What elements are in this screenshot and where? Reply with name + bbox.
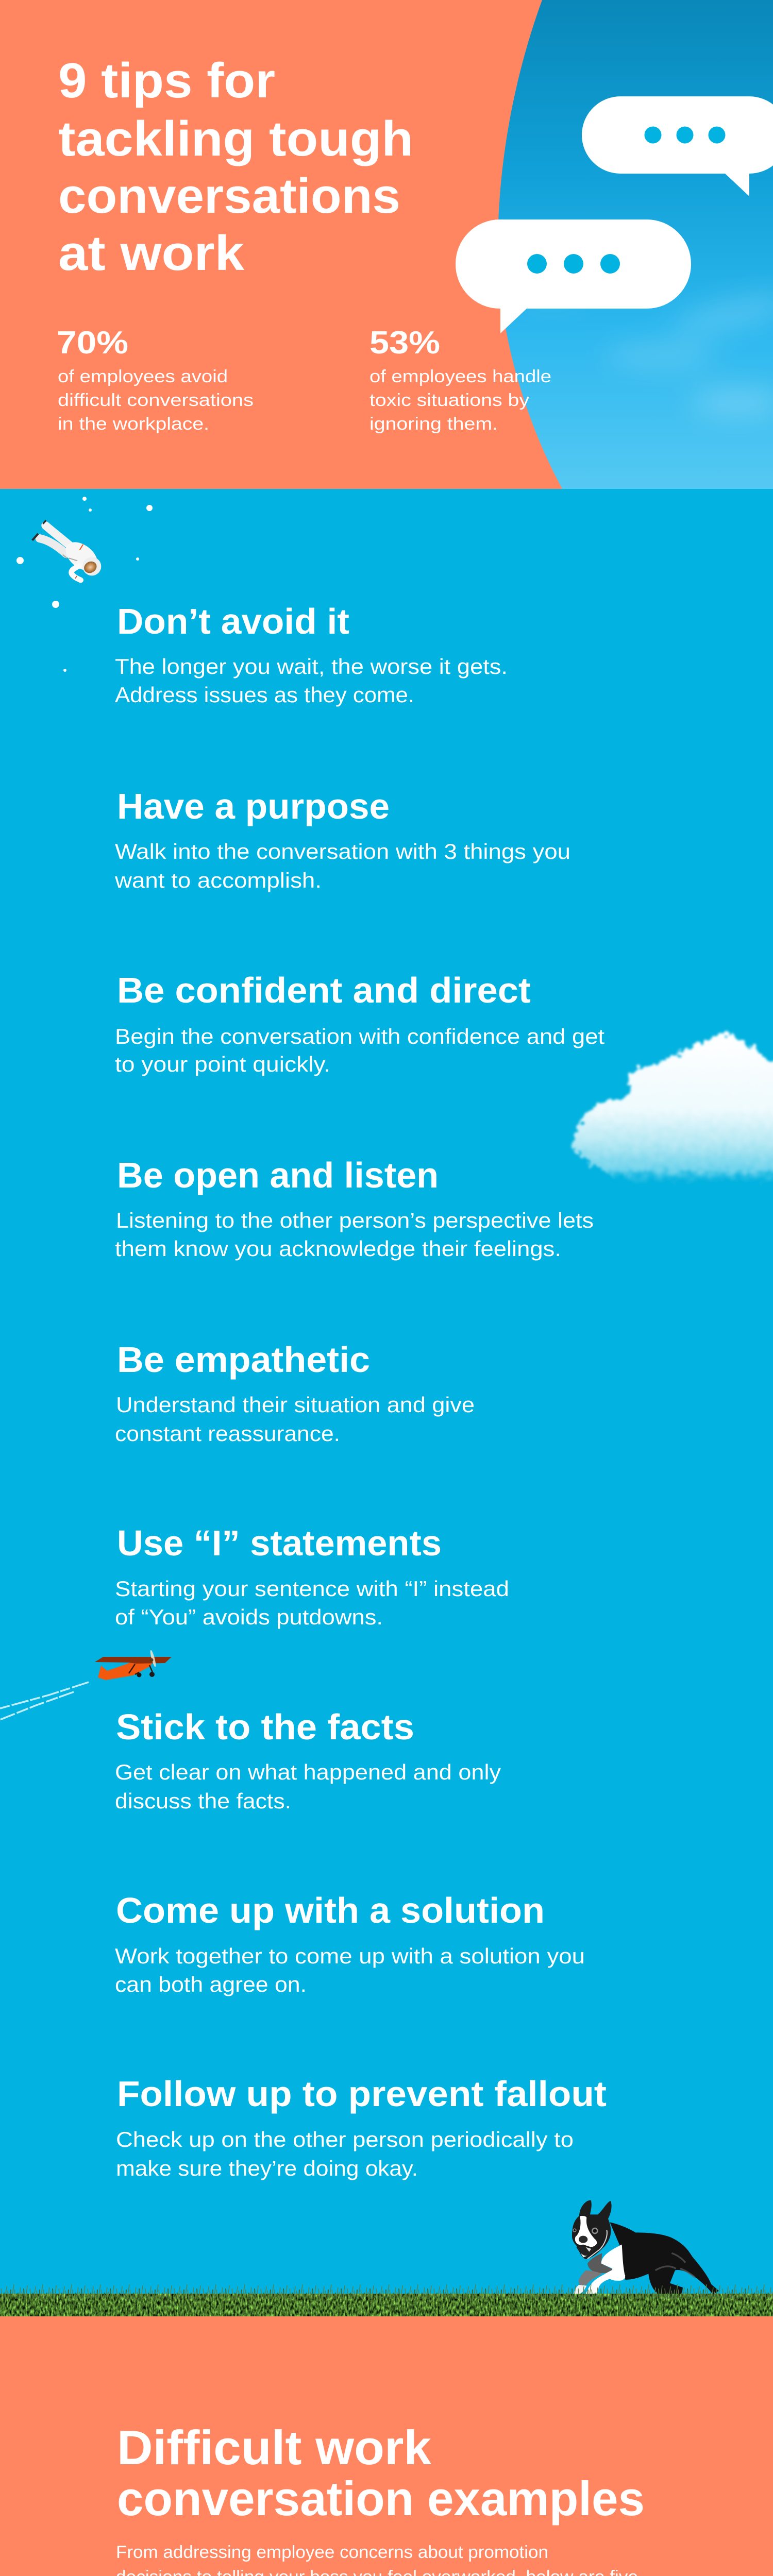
tip 8: can both agree on. — [115, 1972, 307, 1996]
stat: 70%: 70% — [57, 325, 128, 361]
icon: cloud — [573, 1035, 773, 1185]
title: conversations — [58, 168, 400, 224]
stat: 70%: difficult conversations — [58, 391, 254, 410]
tip 1: Address issues as they come. — [115, 683, 414, 707]
tip 2 — [114, 786, 570, 892]
tip 9: make sure they’re doing okay. — [116, 2156, 418, 2180]
tip 5 — [115, 1340, 475, 1446]
stat: 53%: 53% — [369, 325, 440, 361]
tip 6: Use “I” statements — [117, 1523, 442, 1563]
stat: 53%: ignoring them. — [369, 414, 498, 434]
tip 9: Follow up to prevent fallout — [117, 2074, 607, 2114]
tip 5: Understand their situation and give — [116, 1393, 475, 1417]
speech bubble: left — [456, 219, 691, 333]
tip 3: to your point quickly. — [115, 1052, 330, 1076]
tip 7: Stick to the facts — [116, 1707, 414, 1747]
tip 7 — [115, 1707, 501, 1813]
tip 9: Check up on the other person periodically to — [116, 2127, 574, 2151]
tip 1: Don’t avoid it — [117, 601, 349, 641]
tip 5: Be empathetic — [117, 1340, 370, 1380]
title: 9 tips for — [58, 53, 275, 108]
stat: 70%: of employees avoid — [58, 367, 228, 386]
tip 3: Be confident and direct — [117, 970, 531, 1010]
panel: header — [0, 0, 773, 654]
tip 8: Come up with a solution — [116, 1890, 545, 1930]
grass — [0, 2282, 773, 2316]
tip 6: Starting your sentence with “I” instead — [115, 1577, 509, 1601]
section heading: Difficult work — [117, 2420, 432, 2475]
tip 1: The longer you wait, the worse it gets. — [115, 654, 508, 679]
tip 3: Begin the conversation with confidence and get — [115, 1024, 604, 1048]
tip 4: Listening to the other person’s perspective lets — [116, 1208, 594, 1232]
icon: dog — [572, 2200, 719, 2303]
tip 8 — [115, 1890, 585, 1996]
tip 4: Be open and listen — [117, 1155, 439, 1195]
panel: difficult work conversation examples — [0, 2316, 773, 2576]
speech bubble: right — [582, 96, 773, 196]
stat: 53%: of employees handle — [369, 367, 551, 386]
tip 8: Work together to come up with a solution you — [115, 1944, 585, 1968]
tip 6 — [115, 1523, 509, 1629]
tip 3 — [115, 970, 604, 1076]
tip 2: want to accomplish. — [114, 868, 322, 892]
tip 7: Get clear on what happened and only — [115, 1760, 501, 1784]
tip 7: discuss the facts. — [115, 1789, 291, 1813]
stars — [16, 497, 153, 672]
tip 1 — [115, 601, 508, 707]
sky circle photo — [498, 0, 773, 654]
title: tackling tough — [58, 111, 413, 166]
panel: tips — [0, 489, 773, 2316]
tip 4: them know you acknowledge their feelings. — [115, 1236, 561, 1261]
stat: 70%: in the workplace. — [58, 414, 209, 434]
tip 2: Walk into the conversation with 3 things you — [115, 839, 570, 863]
tip 9 — [116, 2074, 607, 2180]
icon: astronaut — [32, 520, 103, 580]
icon: plane with contrails — [0, 1650, 172, 1720]
title — [58, 53, 413, 281]
stat: 70% — [57, 325, 254, 434]
section heading: conversation examples — [117, 2471, 645, 2526]
stat: 53%: toxic situations by — [369, 391, 529, 410]
tip 5: constant reassurance. — [115, 1421, 340, 1446]
intro text — [116, 2543, 638, 2576]
tip 4 — [115, 1155, 594, 1261]
section heading — [117, 2420, 645, 2526]
title: at work — [58, 226, 245, 281]
stat: 53% — [369, 325, 551, 434]
tip 2: Have a purpose — [117, 786, 390, 826]
intro text: From addressing employee concerns about promotion — [116, 2543, 548, 2562]
tip 6: of “You” avoids putdowns. — [115, 1605, 383, 1629]
